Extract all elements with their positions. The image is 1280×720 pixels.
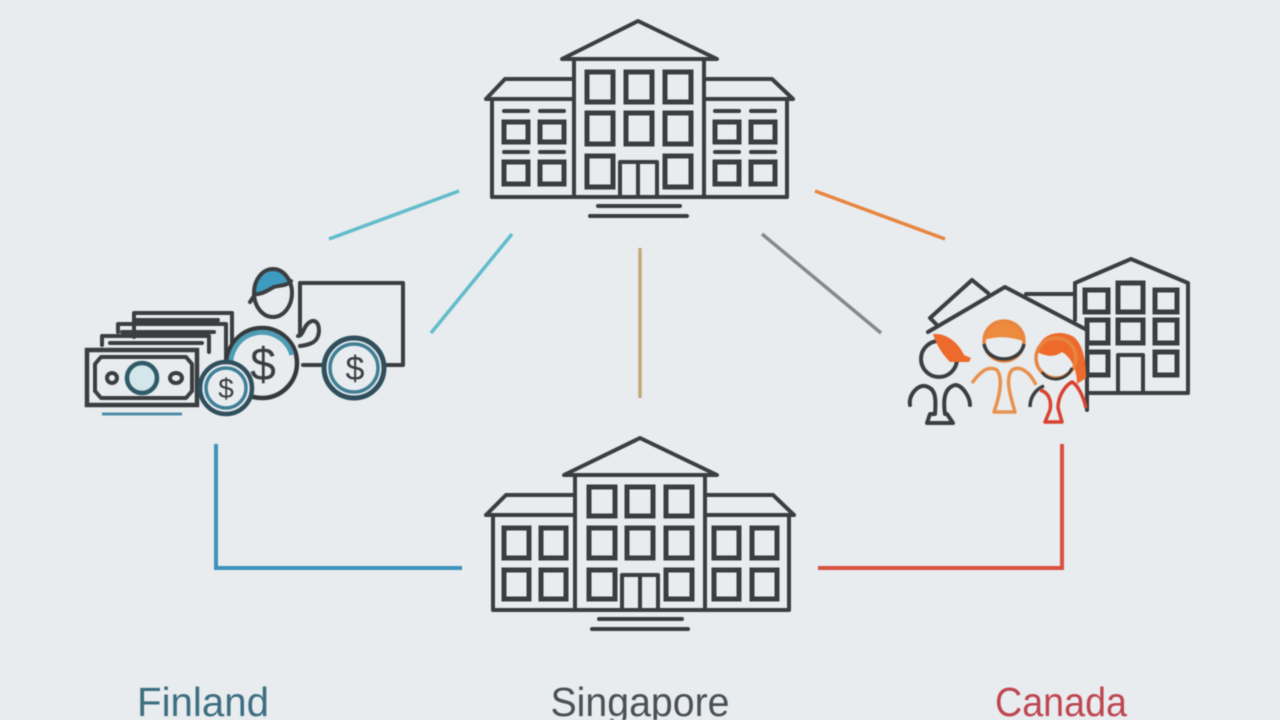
hand (298, 321, 319, 346)
front bill (87, 350, 197, 405)
person: right (1030, 333, 1086, 422)
large coin (227, 328, 297, 398)
connector: finance icon to bottom building (216, 444, 462, 568)
apartment building (1026, 259, 1188, 393)
connector: top building to finance icon, lower (431, 234, 512, 333)
small coin (200, 362, 252, 414)
person: middle (972, 321, 1036, 412)
icon: money, coins and person (87, 269, 403, 414)
connector: top building to finance icon, upper (329, 191, 459, 239)
connector: family icon to bottom building (818, 444, 1062, 568)
bill underline (102, 412, 182, 416)
house (928, 287, 1087, 410)
board (300, 283, 403, 365)
back roof (930, 280, 988, 324)
back bills (102, 313, 232, 362)
large coin: $ (250, 338, 276, 390)
connector: top building to family icon, grey (762, 234, 881, 333)
icon: top school building (486, 21, 793, 216)
connector: top building to family icon, orange (815, 191, 945, 239)
connector: top building to bottom building (638, 248, 642, 398)
icon: family, house and apartment building (910, 259, 1188, 423)
small coin: $ (218, 373, 234, 404)
person head with blue hair (250, 269, 292, 317)
icon: bottom school building (486, 438, 794, 629)
person: left (910, 334, 971, 423)
right coin: $ (346, 350, 365, 388)
right coin (324, 338, 384, 398)
